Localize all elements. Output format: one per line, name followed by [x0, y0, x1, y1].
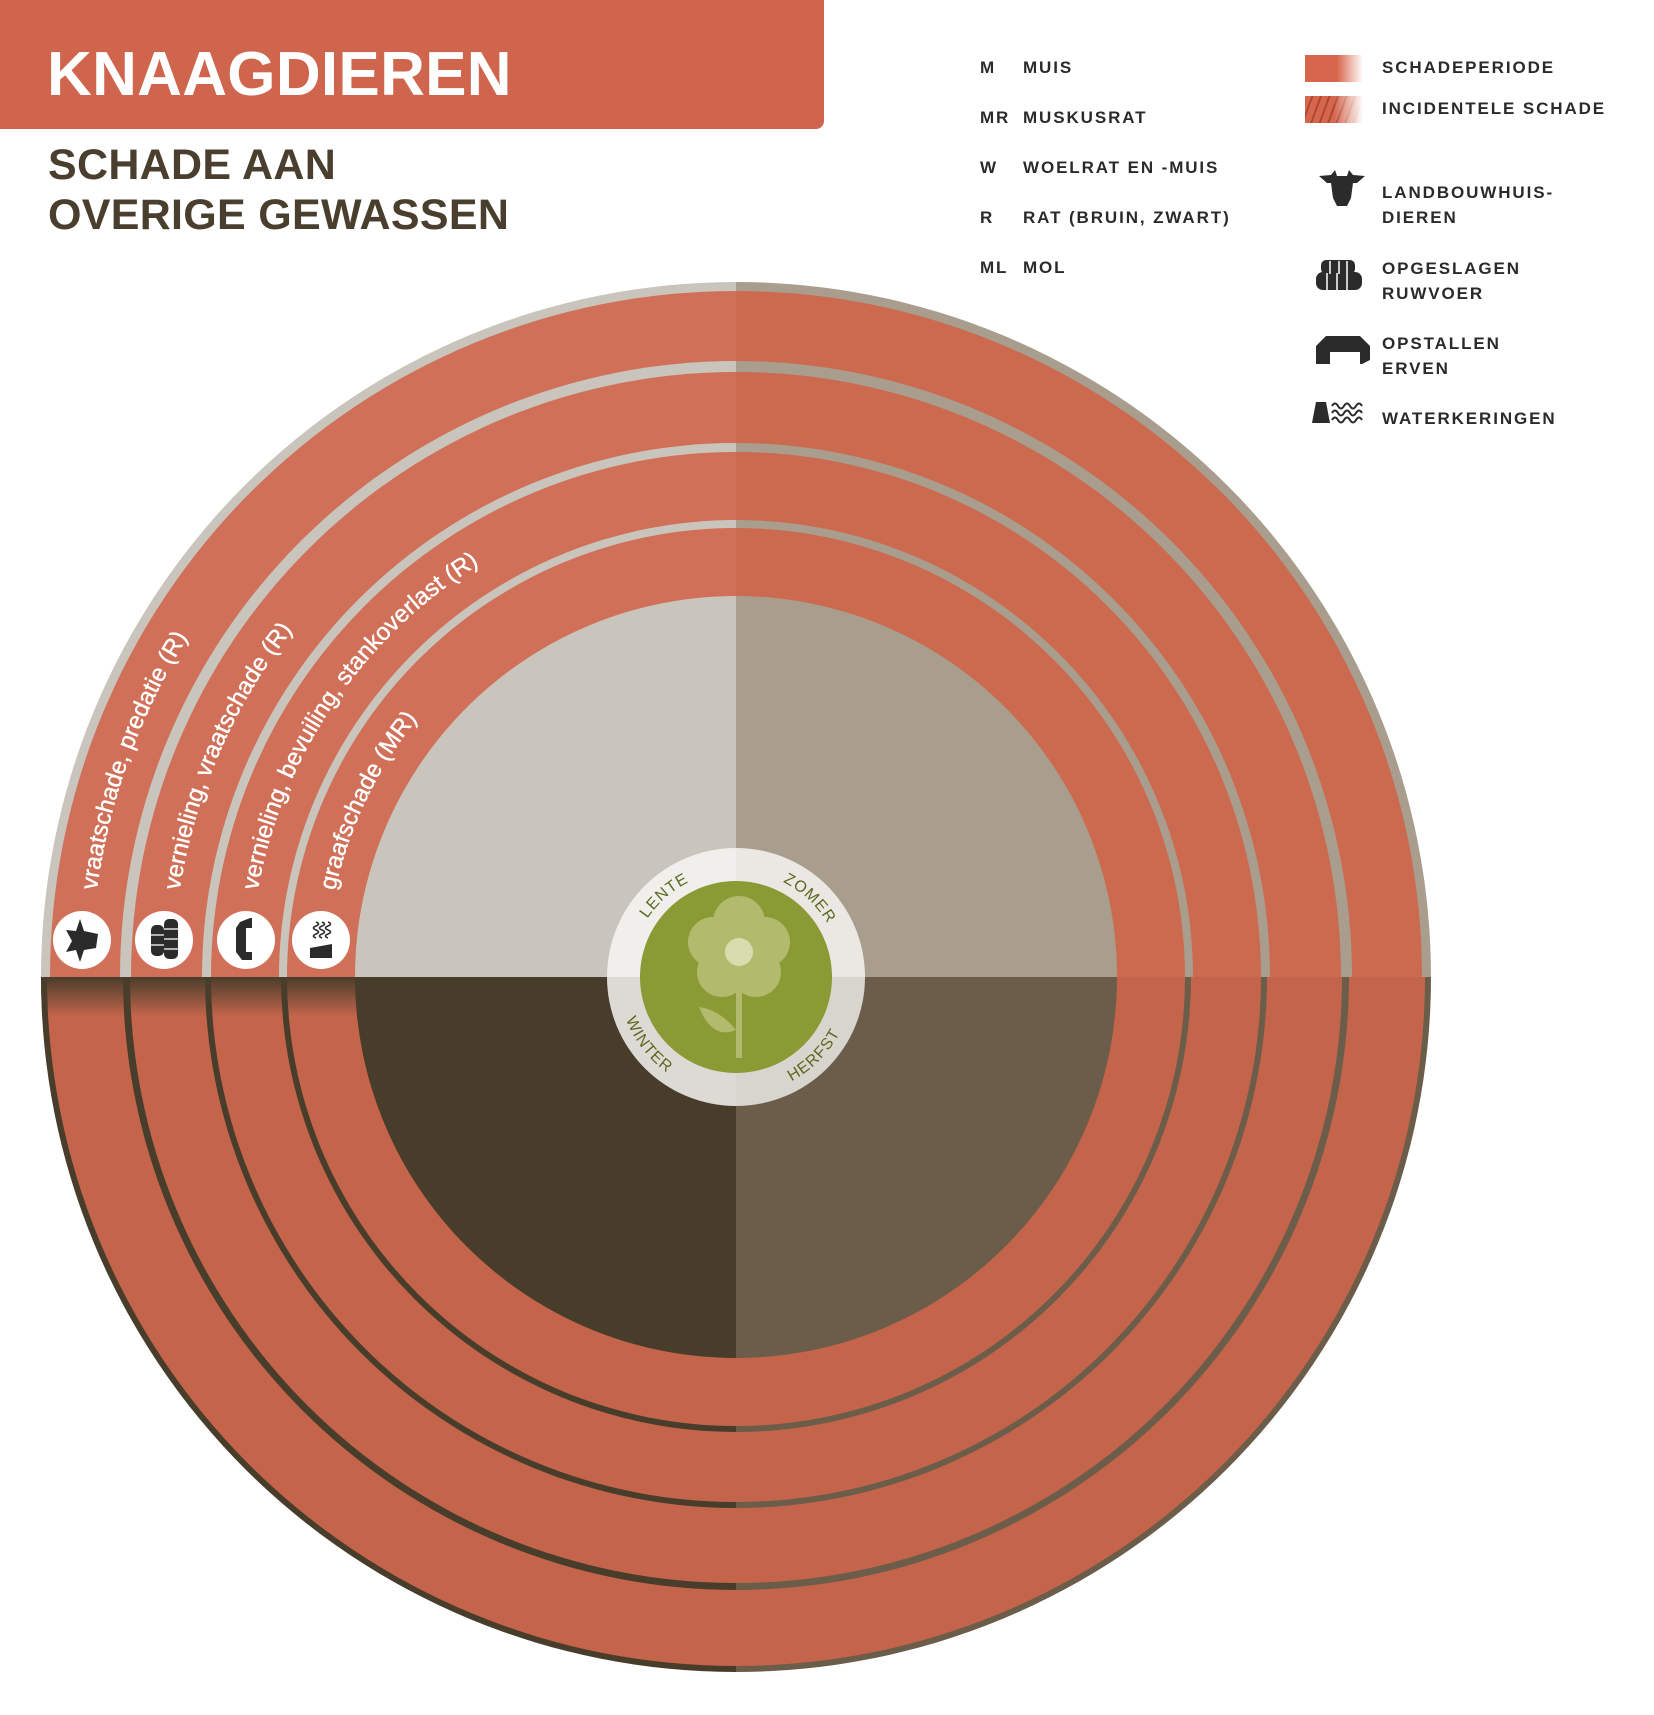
ring labels: graafschade (MR) [324, 712, 418, 890]
legend: symbols: OPGESLAGEN [1382, 259, 1521, 278]
ring labels [84, 552, 478, 890]
season labels: ZOMER [783, 872, 835, 923]
season labels: LENTE [639, 873, 688, 918]
icon: bales [1316, 260, 1362, 290]
subtitle: SCHADE AAN [48, 141, 336, 189]
center: season disc [607, 848, 865, 1106]
season labels: HERFST [787, 1028, 838, 1081]
icon: bales (ring 2) [135, 911, 193, 969]
legend: symbols: ERVEN [1382, 359, 1450, 378]
legend: species: RAT (BRUIN, ZWART) [1023, 208, 1231, 227]
legend: species: MUIS [1023, 58, 1073, 77]
quadrant: summer rings [736, 282, 1431, 977]
legend: species: W [980, 158, 998, 177]
legend: symbols [1305, 55, 1606, 428]
icon: bird (ring 1) [53, 911, 111, 969]
legend: symbols: RUWVOER [1382, 284, 1484, 303]
icon: flower [688, 896, 790, 1058]
icon: barn (ring 3) [217, 911, 275, 969]
swatch: schadeperiode [1305, 55, 1363, 82]
quadrant: autumn rings [736, 977, 1431, 1672]
legend: symbols: LANDBOUWHUIS- [1382, 183, 1554, 202]
icon: dike [1312, 402, 1363, 424]
legend: species: MUSKUSRAT [1023, 108, 1147, 127]
legend: species: ML [980, 258, 1008, 277]
title text: KNAAGDIEREN [47, 40, 512, 109]
season labels: WINTER [627, 1014, 672, 1072]
season wheel chart [41, 282, 1431, 1672]
legend: symbols: SCHADEPERIODE [1382, 58, 1555, 77]
subtitle: OVERIGE GEWASSEN [48, 191, 509, 239]
icon: cow [1319, 170, 1365, 206]
subtitle [48, 141, 509, 239]
legend: species: MR [980, 108, 1010, 127]
legend: symbols: OPSTALLEN [1382, 334, 1501, 353]
legend: symbols: DIEREN [1382, 208, 1458, 227]
legend: species [980, 58, 1231, 277]
ring labels: vernieling, bevuiling, stankoverlast (R) [245, 552, 478, 888]
icon: dike (ring 4) [292, 911, 350, 969]
quadrant: spring rings [41, 282, 736, 977]
legend: species: WOELRAT EN -MUIS [1023, 158, 1219, 177]
legend: species: R [980, 208, 994, 227]
legend: symbols: WATERKERINGEN [1382, 409, 1557, 428]
ring labels: vernieling, vraatschade (R) [166, 624, 294, 888]
legend: symbols: INCIDENTELE SCHADE [1382, 99, 1606, 118]
season labels [627, 872, 838, 1081]
title banner [0, 0, 824, 129]
quadrant: winter rings [41, 977, 736, 1672]
swatch: incidentele schade [1305, 96, 1363, 123]
ring labels: vraatschade, predatie (R) [84, 632, 190, 889]
icon: barn [1316, 336, 1370, 364]
legend: species: MOL [1023, 258, 1066, 277]
legend: species: M [980, 58, 996, 77]
